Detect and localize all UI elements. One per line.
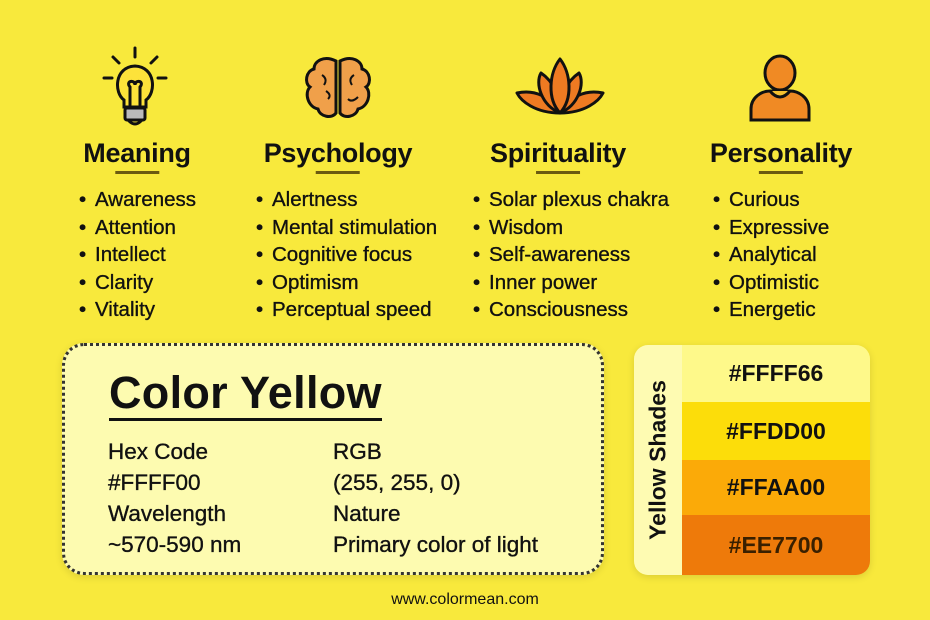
list: personality: Curious	[729, 188, 800, 211]
list: psychology	[256, 188, 437, 321]
text: hex code	[108, 439, 241, 557]
text: hex code: #FFFF00	[108, 470, 201, 495]
list: personality: Energetic	[729, 298, 816, 321]
panel: color yellow info	[62, 343, 604, 575]
icon: brain	[305, 57, 371, 118]
text: rgb: Nature	[333, 501, 401, 526]
label: Yellow Shades: Yellow Shades	[644, 380, 670, 540]
list: psychology: Mental stimulation	[272, 216, 437, 238]
list: personality	[714, 188, 829, 321]
icon: person	[750, 54, 810, 122]
heading: Meaning: Meaning	[83, 138, 191, 168]
list: personality: Expressive	[729, 216, 829, 238]
text: rgb	[333, 439, 538, 557]
swatch EE7700: #EE7700	[729, 532, 823, 558]
list: psychology: Cognitive focus	[272, 243, 412, 266]
footer url: www.colormean.com	[391, 591, 539, 608]
list: meaning: Clarity	[95, 270, 153, 294]
swatch FFFF66: #FFFF66	[729, 360, 823, 386]
list: psychology: Optimism	[272, 270, 359, 294]
icon: lotus	[515, 57, 605, 115]
list: personality: Optimistic	[729, 270, 819, 294]
title: Color Yellow: Color Yellow	[109, 367, 382, 418]
list: meaning: Intellect	[95, 243, 166, 266]
text: rgb: Primary color of light	[333, 532, 538, 557]
swatch FFAA00: #FFAA00	[727, 474, 825, 500]
list: spirituality: Self-awareness	[489, 243, 630, 266]
list: meaning	[80, 188, 196, 321]
text: rgb: (255, 255, 0)	[333, 470, 461, 495]
list: meaning: Vitality	[95, 298, 155, 321]
label: Yellow Shades	[634, 345, 682, 575]
heading: Personality: Personality	[710, 138, 852, 168]
list: spirituality	[474, 188, 670, 321]
list: spirituality: Consciousness	[489, 298, 628, 321]
text: hex code: Wavelength	[108, 501, 226, 526]
swatch FFAA00	[682, 460, 870, 515]
heading: Spirituality: Spirituality	[490, 138, 626, 168]
list: psychology: Perceptual speed	[272, 298, 432, 321]
text: hex code: Hex Code	[108, 439, 208, 464]
list: personality: Analytical	[729, 243, 817, 266]
list: spirituality: Wisdom	[489, 216, 563, 238]
swatch FFDD00: #FFDD00	[726, 418, 826, 444]
list: meaning: Awareness	[95, 188, 196, 211]
swatch EE7700	[682, 515, 870, 575]
swatch FFDD00	[682, 402, 870, 460]
list: meaning: Attention	[95, 216, 176, 238]
list: spirituality: Inner power	[489, 270, 597, 294]
heading: Psychology: Psychology	[264, 138, 412, 168]
icon: light bulb	[102, 46, 168, 126]
list: spirituality: Solar plexus chakra	[489, 188, 669, 211]
swatch FFFF66	[682, 345, 870, 402]
text: rgb: RGB	[333, 439, 382, 464]
text: hex code: ~570-590 nm	[108, 532, 241, 557]
panel: yellow shades	[634, 345, 870, 575]
list: psychology: Alertness	[272, 188, 357, 211]
